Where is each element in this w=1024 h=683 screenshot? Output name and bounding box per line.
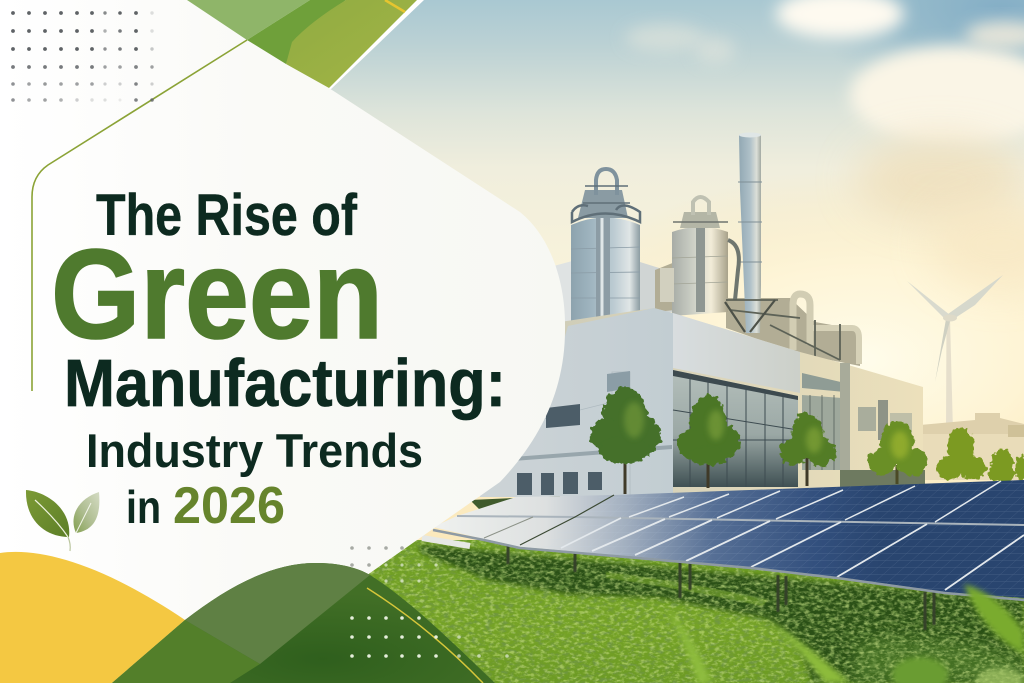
- panel frames: [457, 481, 1024, 590]
- tree 7: [1015, 455, 1024, 481]
- pipework: [725, 294, 859, 364]
- tree 3: [779, 413, 835, 486]
- shaded grass under panels: [420, 545, 1024, 683]
- green hill: [112, 563, 495, 683]
- panel supports: [508, 545, 934, 630]
- yellow wave: [0, 552, 185, 683]
- tree 4: [868, 421, 927, 484]
- machinery behind building: [655, 262, 860, 366]
- title line: Industry Trends: Industry Trends: [86, 424, 423, 477]
- light green facet: [187, 0, 310, 40]
- top green banner: [187, 0, 417, 88]
- dot grid bottom: [350, 546, 509, 658]
- white hexagon title panel: [0, 0, 565, 683]
- dot grid top-left: [11, 11, 154, 102]
- tree 6: [988, 449, 1016, 481]
- glass facade: [673, 370, 845, 487]
- panels back row: [460, 480, 1024, 516]
- panel bottom rail: [433, 530, 1024, 600]
- dark hill base: [112, 563, 495, 683]
- left white face: [480, 308, 673, 497]
- yellow accent: [385, 0, 405, 12]
- tree 1: [590, 387, 661, 494]
- ground strip behind panels: [470, 496, 560, 510]
- factory: [480, 132, 1024, 497]
- background building right: [920, 413, 1024, 480]
- mid green facet: [247, 0, 346, 64]
- photo: factory scene: [330, 0, 1024, 683]
- trees: [590, 387, 1024, 494]
- mid-green patch right: [850, 638, 1024, 683]
- tall chimney: [738, 132, 762, 333]
- left silo: [571, 169, 640, 326]
- foreground grass blades: [665, 584, 1024, 683]
- east wing windows: [840, 363, 925, 490]
- main building upper band: [565, 308, 923, 493]
- title line: Manufacturing: Manufacturing:: [64, 346, 506, 421]
- solar panels: [422, 480, 1024, 600]
- title line: Green: Green: [51, 223, 383, 365]
- tree 5: [937, 428, 986, 480]
- window bands left: [500, 371, 672, 495]
- sky: [330, 0, 1024, 560]
- olive facet: [286, 0, 417, 88]
- sunlit grass strip: [606, 572, 768, 606]
- right silo: [660, 197, 739, 316]
- grass field: [340, 540, 1024, 683]
- panels front row: [433, 516, 1024, 598]
- signage band: [673, 313, 800, 393]
- title: [51, 183, 506, 535]
- light hill facet: [185, 563, 370, 664]
- title line: The Rise of: The Rise of: [96, 183, 358, 248]
- yellow arc: [367, 588, 483, 683]
- title line: in: in: [126, 481, 161, 533]
- title line: 2026: 2026: [173, 477, 285, 535]
- olive outline curve: [32, 40, 247, 391]
- tree 2: [677, 395, 740, 488]
- icon: leaves: [26, 490, 99, 551]
- back wall: [556, 262, 571, 322]
- wind turbine: [907, 275, 1003, 432]
